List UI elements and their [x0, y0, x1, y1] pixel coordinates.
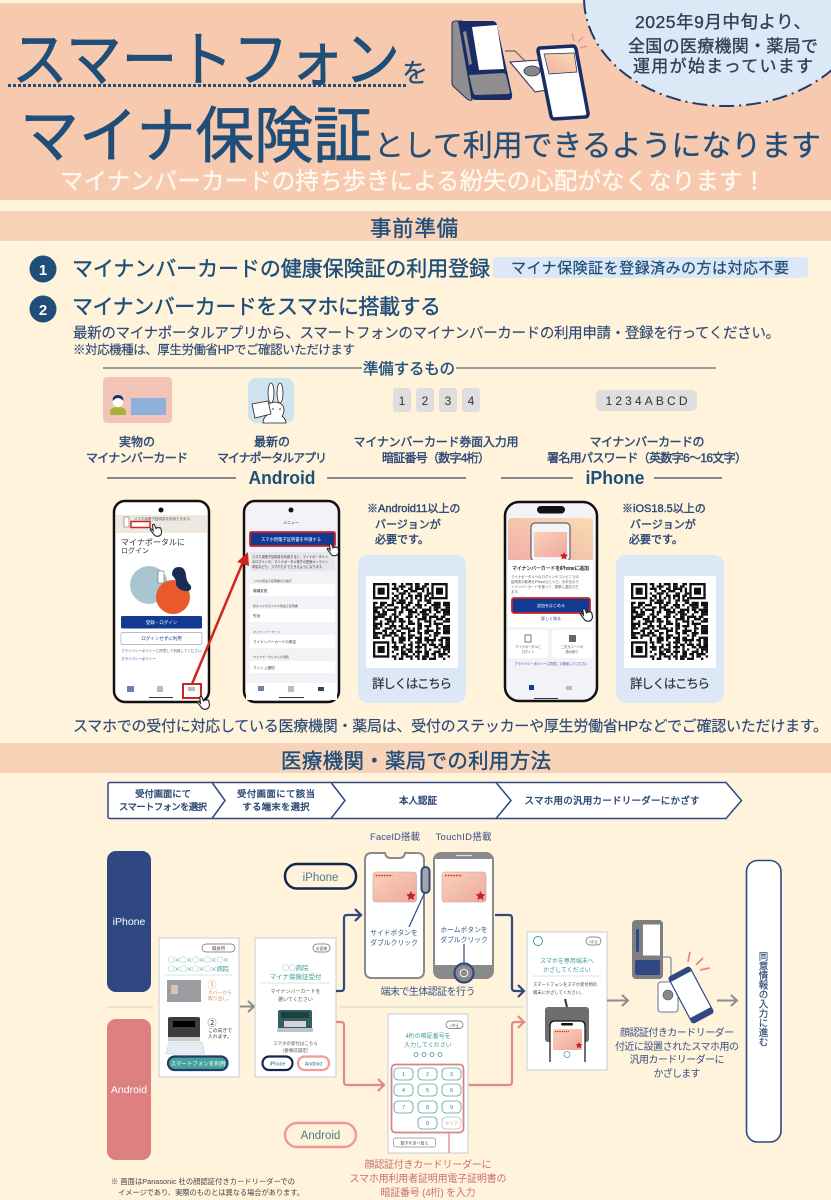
keypad: 7	[402, 1105, 405, 1111]
note: Android version: バージョンが	[375, 517, 441, 531]
arrow: grey step to consent	[717, 995, 737, 1006]
item: signing password: 1234ABCD	[606, 394, 688, 408]
keypad: 3	[450, 1072, 453, 1078]
phone: Android login screen: ログイン	[121, 546, 149, 555]
step 2: 最新のマイナポータルアプリから、スマートフォンのマイナンバーカードの利用申請・登録を行ってください。	[73, 325, 780, 342]
phone: Android login screen: スマホ用電子証明書を利用できます。	[134, 516, 193, 521]
note: Android version: 必要です。	[375, 533, 429, 546]
screen: hold over reader: 端末にかざしてください。	[533, 989, 584, 996]
item: physical card	[86, 377, 188, 465]
QR panel: Android: 詳しくはこちら	[372, 676, 452, 691]
item: signing password: 署名用パスワード（英数字6～16文字）	[547, 450, 747, 465]
note: iOS version	[622, 502, 706, 546]
process chevrons: 受付画面にて該当	[237, 788, 315, 799]
title line 2: として利用できるようになります	[374, 130, 821, 163]
phone: iPhone add screen: 読み取り	[566, 649, 578, 654]
phone: Android menu screen: マイナンバーカードの設定	[253, 639, 296, 644]
item: app	[217, 378, 327, 465]
screen: staff card: ①	[207, 978, 217, 991]
arrow: iPhone flow	[336, 909, 524, 997]
phone: iPhone add screen: マイナンバーカードをiPhoneに追加	[512, 565, 589, 572]
item: app: マイナポータルアプリ	[217, 451, 327, 465]
process chevrons: スマホ用の汎用カードリーダーにかざす	[524, 795, 700, 807]
date callout: 2025年9月中旬より、	[635, 12, 811, 32]
phone: Android login screen: 登録・ログイン	[146, 619, 178, 626]
phone: Android menu screen	[244, 501, 339, 702]
final step: consent: の	[759, 990, 768, 1001]
caption: hold over reader	[615, 1026, 739, 1080]
screen: staff card: スマートフォンを利用	[171, 1060, 225, 1068]
phone: Android menu screen: 申請なども、スマホだけでできるようになります。	[252, 564, 325, 569]
phone: iPhone add screen: プライバシーポリシーに同意して利用してください	[515, 661, 587, 666]
screen: PIN entry: 数字を並べ替え	[400, 1140, 428, 1146]
keypad: 6	[450, 1088, 453, 1094]
title line 2: マイナ保険証	[20, 102, 372, 170]
note: Android version	[367, 502, 460, 546]
final step: consent: 報	[759, 980, 769, 992]
note: supported facilities: スマホでの受付に対応している医療機関・薬局は、受付のステッカーや厚生労働省HPなどでご確認いただけます。	[73, 718, 828, 735]
label: FaceID: FaceID搭載	[370, 831, 420, 843]
phone: TouchID	[433, 852, 494, 982]
phone: Android login screen: ログインせずに利用	[141, 635, 182, 642]
item: 4 digit PIN: 2	[422, 394, 429, 408]
phone: iPhone add screen: 追加をはじめる	[537, 602, 565, 608]
screen: reception card	[255, 938, 336, 1077]
phone: Android menu screen: スマホ用電子証明書を申請する	[261, 536, 321, 543]
phone: iPhone add screen: 詳しく知る	[541, 615, 561, 621]
caption: PIN entry: 暗証番号 (4桁) を入力	[380, 1186, 476, 1199]
section bar: usage	[0, 743, 831, 773]
step 1: 1	[39, 262, 47, 279]
section bar: usage: 医療機関・薬局での利用方法	[281, 750, 551, 773]
illustration: person with phone	[130, 566, 191, 614]
screen: PIN entry: 4桁の暗証番号を	[405, 1032, 451, 1040]
note: Android version: ※Android11以上の	[367, 502, 460, 515]
header band	[0, 0, 831, 200]
arrow: grey step	[240, 1001, 254, 1012]
step 2: ※対応機種は、厚生労働省HPでご確認いただけます	[73, 342, 355, 357]
title line 1: を	[402, 58, 428, 88]
label: Android lane	[107, 1019, 151, 1160]
legend: iPhone pill	[285, 864, 356, 888]
phone: Android login screen: プライバシーポリシー	[121, 656, 156, 661]
arrow: Android flow	[336, 1016, 524, 1091]
icon: general card reader with phone	[632, 920, 714, 1024]
phone: Android menu screen: マイナンバーカード	[253, 629, 280, 634]
label: iPhone lane	[107, 851, 151, 992]
caption: PIN entry: 顔認証付きカードリーダーに	[364, 1158, 492, 1171]
QR panel: Android	[358, 555, 466, 703]
keypad: 9	[450, 1105, 453, 1111]
heading: Android: Android	[248, 468, 316, 488]
caption: biometric: 端末で生体認証を行う	[380, 985, 476, 998]
arrow: grey step to reader	[607, 995, 628, 1006]
screen: staff card: カバーから	[208, 989, 232, 996]
legend: iPhone pill: iPhone	[303, 872, 338, 884]
icon: reader and phone	[452, 21, 588, 119]
screen: staff card: ②	[207, 1016, 217, 1029]
step 1	[30, 256, 808, 282]
keypad: 2	[426, 1072, 429, 1078]
caption: hold over reader: 顔認証付きカードリーダー	[620, 1026, 734, 1039]
screen: reception card: お客様	[316, 946, 327, 951]
step 1: マイナンバーカードの健康保険証の利用登録	[72, 258, 490, 281]
phone: FaceID: ダブルクリック	[370, 938, 418, 947]
heading: items to prepare	[103, 358, 716, 378]
legend: Android pill	[285, 1123, 356, 1147]
phone: Android menu screen: プッシュ通知	[253, 665, 275, 670]
final step: consent: む	[759, 1038, 768, 1048]
screen: hold over reader	[527, 932, 607, 1070]
keypad: 0	[426, 1121, 429, 1127]
caption: hold over reader: 汎用カードリーダーに	[630, 1053, 724, 1066]
step 2: マイナンバーカードをスマホに搭載する	[72, 296, 441, 319]
phone: iPhone add screen	[505, 502, 597, 701]
step 2: 2	[39, 302, 47, 319]
screen: staff card: ○×○×○×○×病院	[168, 963, 230, 973]
screen: reception card: Android	[305, 1062, 322, 1068]
screen: staff card: 職員用	[212, 945, 225, 952]
keypad: 4	[402, 1088, 405, 1094]
phone: iPhone add screen: マイナポータルに	[515, 644, 541, 649]
divider	[107, 1006, 523, 1008]
screen: reception card: iPhone	[270, 1062, 285, 1068]
label: Android lane: Android	[111, 1084, 147, 1096]
phone: Android menu screen: のログインや、マイナポータル電子の医療オンライン	[252, 559, 328, 564]
item: signing password: マイナンバーカードの	[590, 435, 704, 449]
final step: consent: 進	[759, 1027, 769, 1039]
phone: Android menu screen: 別のスマホのスマホ用電子証明書	[253, 603, 298, 608]
QR panel: iPhone	[616, 555, 724, 703]
item: app: 最新の	[254, 435, 290, 449]
item: physical card: マイナンバーカード	[86, 451, 188, 465]
item: 4 digit PIN: 3	[445, 394, 452, 408]
phone: FaceID	[365, 853, 430, 978]
final step: consent: に	[759, 1018, 768, 1030]
phone: iPhone add screen: イナンバーカードを使って、簡単に追加でき	[511, 584, 578, 589]
process chevrons: スマートフォンを選択	[119, 801, 208, 812]
date callout	[584, 0, 831, 106]
phone: FaceID: サイドボタンを	[370, 928, 418, 937]
title line 1: スマートフォン	[12, 27, 400, 94]
screen: PIN entry: 入力してください	[404, 1041, 452, 1049]
arrow: red menu arrow	[192, 552, 249, 684]
screen: staff card: 入れます。	[208, 1034, 232, 1040]
phone: TouchID: ホームボタンを	[440, 925, 488, 934]
title line 2	[20, 102, 821, 170]
keypad: 1	[402, 1072, 405, 1078]
note: iOS version: ※iOS18.5以上の	[622, 502, 706, 515]
legend: Android pill: Android	[301, 1130, 340, 1142]
item: signing password	[547, 390, 747, 465]
phone: iPhone add screen: 二次元コードの	[561, 644, 583, 649]
phone: Android menu screen: 機種変更	[253, 588, 268, 593]
process chevrons: する端末を選択	[242, 801, 310, 812]
caption: PIN entry	[350, 1158, 506, 1199]
screen: PIN entry: ×中止	[450, 1023, 460, 1028]
phone: Android menu screen: マイナポータルからの通知	[253, 654, 289, 659]
item: physical card: 実物の	[119, 435, 155, 449]
final step: consent: 力	[759, 1008, 768, 1020]
label: iPhone lane: iPhone	[113, 916, 146, 928]
phone: TouchID: ダブルクリック	[440, 935, 488, 944]
process chevrons: 受付画面にて	[135, 788, 191, 799]
section bar: preparation: 事前準備	[370, 217, 458, 241]
screen: PIN entry	[388, 1014, 468, 1153]
screen: reception card: ○○病院	[282, 962, 309, 972]
keypad	[392, 1064, 464, 1132]
subtitle: マイナンバーカードの持ち歩きによる紛失の心配がなくなります！	[60, 168, 766, 194]
screen: hold over reader: かざしてください	[543, 966, 591, 974]
QR panel: iPhone: 詳しくはこちら	[630, 676, 710, 691]
note: screen image disclaimer: イメージであり、実際のものとは異なる場合があります。	[118, 1188, 304, 1197]
screen: hold over reader: ×中止	[589, 939, 599, 944]
phone: Android menu screen: メニュー	[283, 520, 299, 525]
phone: Android login screen: プライバシーポリシーに同意して利用してください。	[121, 648, 205, 653]
phone: Android menu screen: 失効	[253, 613, 261, 618]
screen: reception card: マイナ保険証受付	[270, 972, 322, 981]
item: 4 digit PIN: 1	[399, 394, 406, 408]
final step: consent: 同	[759, 952, 768, 963]
final step: consent: 入	[759, 1000, 769, 1010]
phone: Android menu screen: スマホ用電子証明書の引継ぎ	[253, 578, 292, 583]
note: iOS version: バージョンが	[630, 517, 696, 531]
item: 4 digit PIN: 4	[468, 394, 475, 408]
final step: consent	[746, 860, 781, 1142]
heading: items to prepare: 準備するもの	[363, 360, 455, 378]
screen: reception card: スマホの受付はこちら	[273, 1040, 318, 1047]
screen: hold over reader: スマホを専用端末へ	[540, 957, 594, 965]
phone: Android login screen: マイナポータルに	[121, 538, 185, 547]
process chevrons	[108, 782, 742, 818]
screen: staff card: この向きで	[208, 1027, 232, 1034]
date callout: 運用が始まっています	[633, 57, 813, 76]
phone: Android login screen	[114, 501, 210, 709]
screen: staff card	[159, 938, 239, 1077]
phone: Android menu screen: スマホ用電子証明書を利用すると、マイナポータルへ	[252, 554, 329, 559]
heading: iPhone: iPhone	[586, 468, 644, 488]
item: 4 digit PIN: マイナンバーカード券面入力用	[354, 434, 518, 449]
note: screen image disclaimer: ※ 画面はPanasonic 社の顔認証付きカードリーダーでの	[111, 1177, 295, 1186]
note: iOS version: 必要です。	[629, 533, 683, 546]
caption: hold over reader: 付近に設置されたスマホ用の	[615, 1040, 739, 1053]
phone: iPhone add screen: ます。	[511, 589, 521, 594]
note pill: マイナ保険証を登録済みの方は対応不要	[511, 260, 789, 277]
keypad: 8	[426, 1105, 429, 1111]
item: 4 digit PIN	[354, 388, 518, 465]
final step: consent: 意	[759, 960, 769, 972]
caption: PIN entry: スマホ用利用者証明用電子証明書の	[350, 1172, 506, 1185]
screen: hold over reader: スマートフォンをスマホ受付用の	[533, 981, 597, 988]
screen: reception card: マイナンバーカードを	[271, 988, 320, 995]
phone: iPhone add screen: マイナポータルへのログインやコンビニでの	[511, 574, 579, 579]
phone: iPhone add screen: 証明書の取得をiPhoneひとつで。お手元のマ	[511, 579, 579, 584]
screen: staff card: 取り出し。	[208, 995, 232, 1002]
caption: hold over reader: かざします	[654, 1067, 700, 1080]
item: 4 digit PIN: 暗証番号（数字4桁）	[382, 450, 490, 465]
step 2	[30, 296, 780, 357]
screen: reception card: （要事前設定）	[280, 1047, 311, 1054]
keypad: 5	[426, 1088, 429, 1094]
screen: reception card: 置いてください	[278, 996, 313, 1003]
phone: iPhone add screen: ログイン	[522, 649, 534, 654]
keypad: クリア	[445, 1121, 459, 1127]
section bar: preparation	[0, 211, 831, 241]
screen: staff card: ○×○×○×○×○×	[168, 954, 229, 964]
label: TouchID: TouchID搭載	[436, 831, 492, 843]
note: screen image disclaimer	[111, 1177, 304, 1197]
final step: consent: 情	[759, 970, 769, 982]
process chevrons: 本人認証	[399, 795, 437, 807]
date callout: 全国の医療機関・薬局で	[628, 37, 818, 56]
